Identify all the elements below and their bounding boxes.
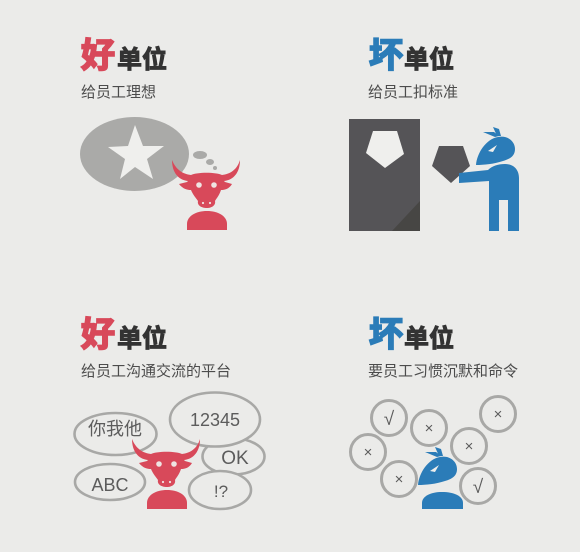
heading: good workplace: 单位 [117,45,167,74]
speech bubble: ABC: ABC [91,475,129,495]
heading: bad workplace: 单位 [404,45,454,74]
circle: check mark: √ [473,477,484,498]
icon: red bull [172,160,240,230]
icon: red bull [132,439,200,509]
circle: cross: × [425,420,433,437]
speech bubble: you me him: 你我他 [88,419,142,439]
heading: good workplace [81,316,167,354]
circle: cross [480,396,516,432]
circle: cross: × [465,438,473,455]
heading: good workplace [81,37,167,75]
panel: bad workplace, docked pay [349,37,519,231]
circle: check mark: √ [384,409,395,430]
circle: cross: × [494,406,502,423]
speech bubble: 12345 [170,392,260,446]
circle: cross: × [395,471,403,488]
circle: cross [350,434,386,470]
heading: bad workplace: 坏 [369,37,403,75]
speech bubble: 12345: 12345 [190,410,240,430]
text: docks employees against the standard: 给员工扣标准 [368,84,458,101]
speech bubble: OK: OK [221,448,249,469]
panel: good workplace, ideals [80,37,240,230]
panel: good workplace, communication [74,316,264,509]
heading: bad workplace: 单位 [404,324,454,353]
icon: blue figure head and shoulders [418,447,463,509]
heading: good workplace: 好 [81,37,115,75]
speech bubble: !?: !? [214,482,228,501]
heading: good workplace: 单位 [117,324,167,353]
circle: cross: × [364,444,372,461]
text: makes employees used to silence and orders: 要员工习惯沉默和命令 [368,362,518,380]
speech bubble: OK [202,438,264,474]
panel: bad workplace, silence and orders [350,316,518,509]
speech bubble: !? [189,471,251,509]
heading: bad workplace [369,316,454,354]
icon: blue figure holding pentagon [459,127,519,231]
circle: check mark [460,468,496,504]
text: gives employees ideals: 给员工理想 [81,84,156,101]
heading: bad workplace: 坏 [369,316,403,354]
icon: thought dots [193,151,217,170]
circle: cross [452,428,486,464]
heading: bad workplace [369,37,454,75]
speech bubble: ABC [75,464,145,500]
speech bubble: you me him [74,413,156,455]
text: gives employees a platform to communicate: 给员工沟通交流的平台 [81,362,231,380]
heading: good workplace: 好 [81,316,115,354]
icon: board with pentagon cutout [349,119,420,231]
circle: cross [382,462,416,496]
icon: dark pentagon piece [432,146,470,183]
circle: check mark [372,400,406,436]
circle: cross [412,410,446,446]
icon: speech bubble with star [80,117,189,191]
